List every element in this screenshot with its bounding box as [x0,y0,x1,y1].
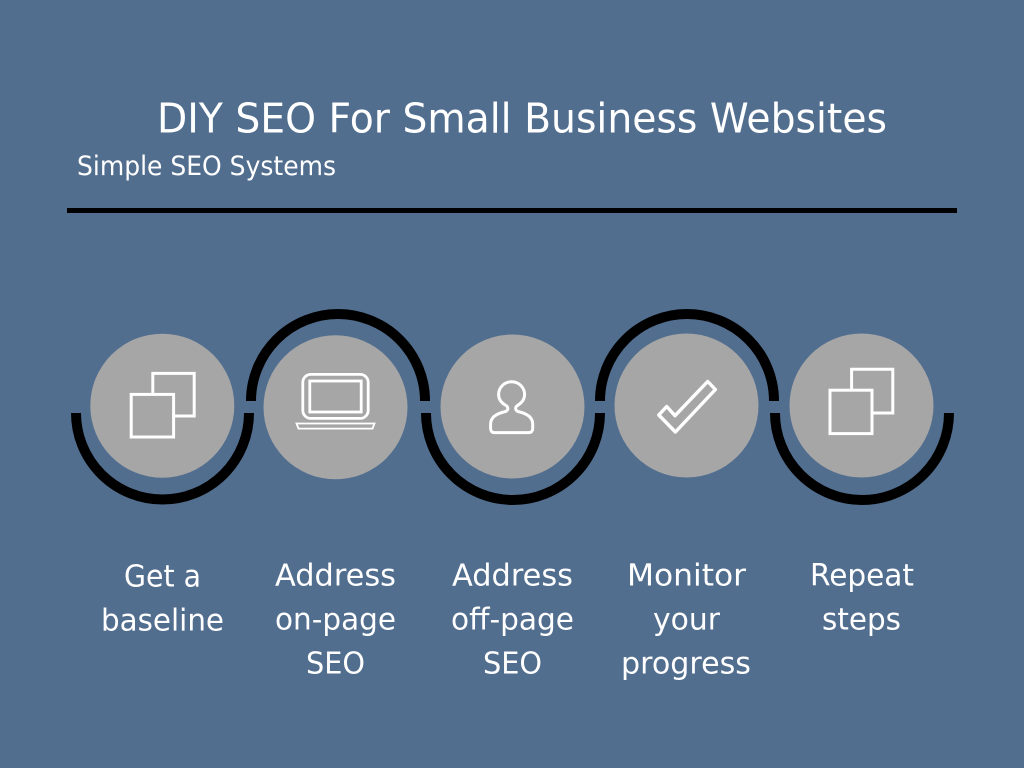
label: step 1: baseline [101,604,224,638]
label: step 4: progress [621,646,751,682]
label: step 2 [275,558,396,682]
label: step 2: Address [275,558,396,594]
step 1 circle [90,334,234,478]
label: step 3: Address [452,558,573,594]
subtitle: Simple SEO Systems [77,151,336,182]
label: step 3: SEO [483,646,542,682]
arc: step 2 upper [251,314,425,401]
label: step 1 [101,560,224,638]
label: step 1: Get a [124,560,201,594]
icon: overlapping squares [131,373,194,437]
step 5 circle [790,334,934,478]
label: step 5: Repeat [810,558,914,594]
title: DIY SEO For Small Business Websites [157,94,887,142]
arc: step 1 lower [76,413,249,499]
step 3 circle [440,334,584,478]
label: step 2: on-page [275,602,396,638]
step 2 circle [264,335,408,479]
icon: check mark [659,382,715,432]
header rule [67,208,957,213]
arc: step 4 upper [600,314,774,401]
arc: step 5 lower [775,413,949,500]
label: step 3: off-page [451,602,574,638]
arc: step 3 lower [426,413,600,500]
label: step 2: SEO [306,646,365,682]
step 4 circle [614,334,758,478]
label: step 4 [621,558,751,682]
label: step 5 [810,558,914,638]
icon: person [491,382,533,433]
label: step 5: steps [822,602,901,638]
label: step 3 [451,558,574,682]
icon: laptop [296,374,374,429]
label: step 4: Monitor [627,558,746,594]
label: step 4: your [653,602,720,638]
process flow [76,314,949,500]
icon: overlapping squares [830,369,893,434]
